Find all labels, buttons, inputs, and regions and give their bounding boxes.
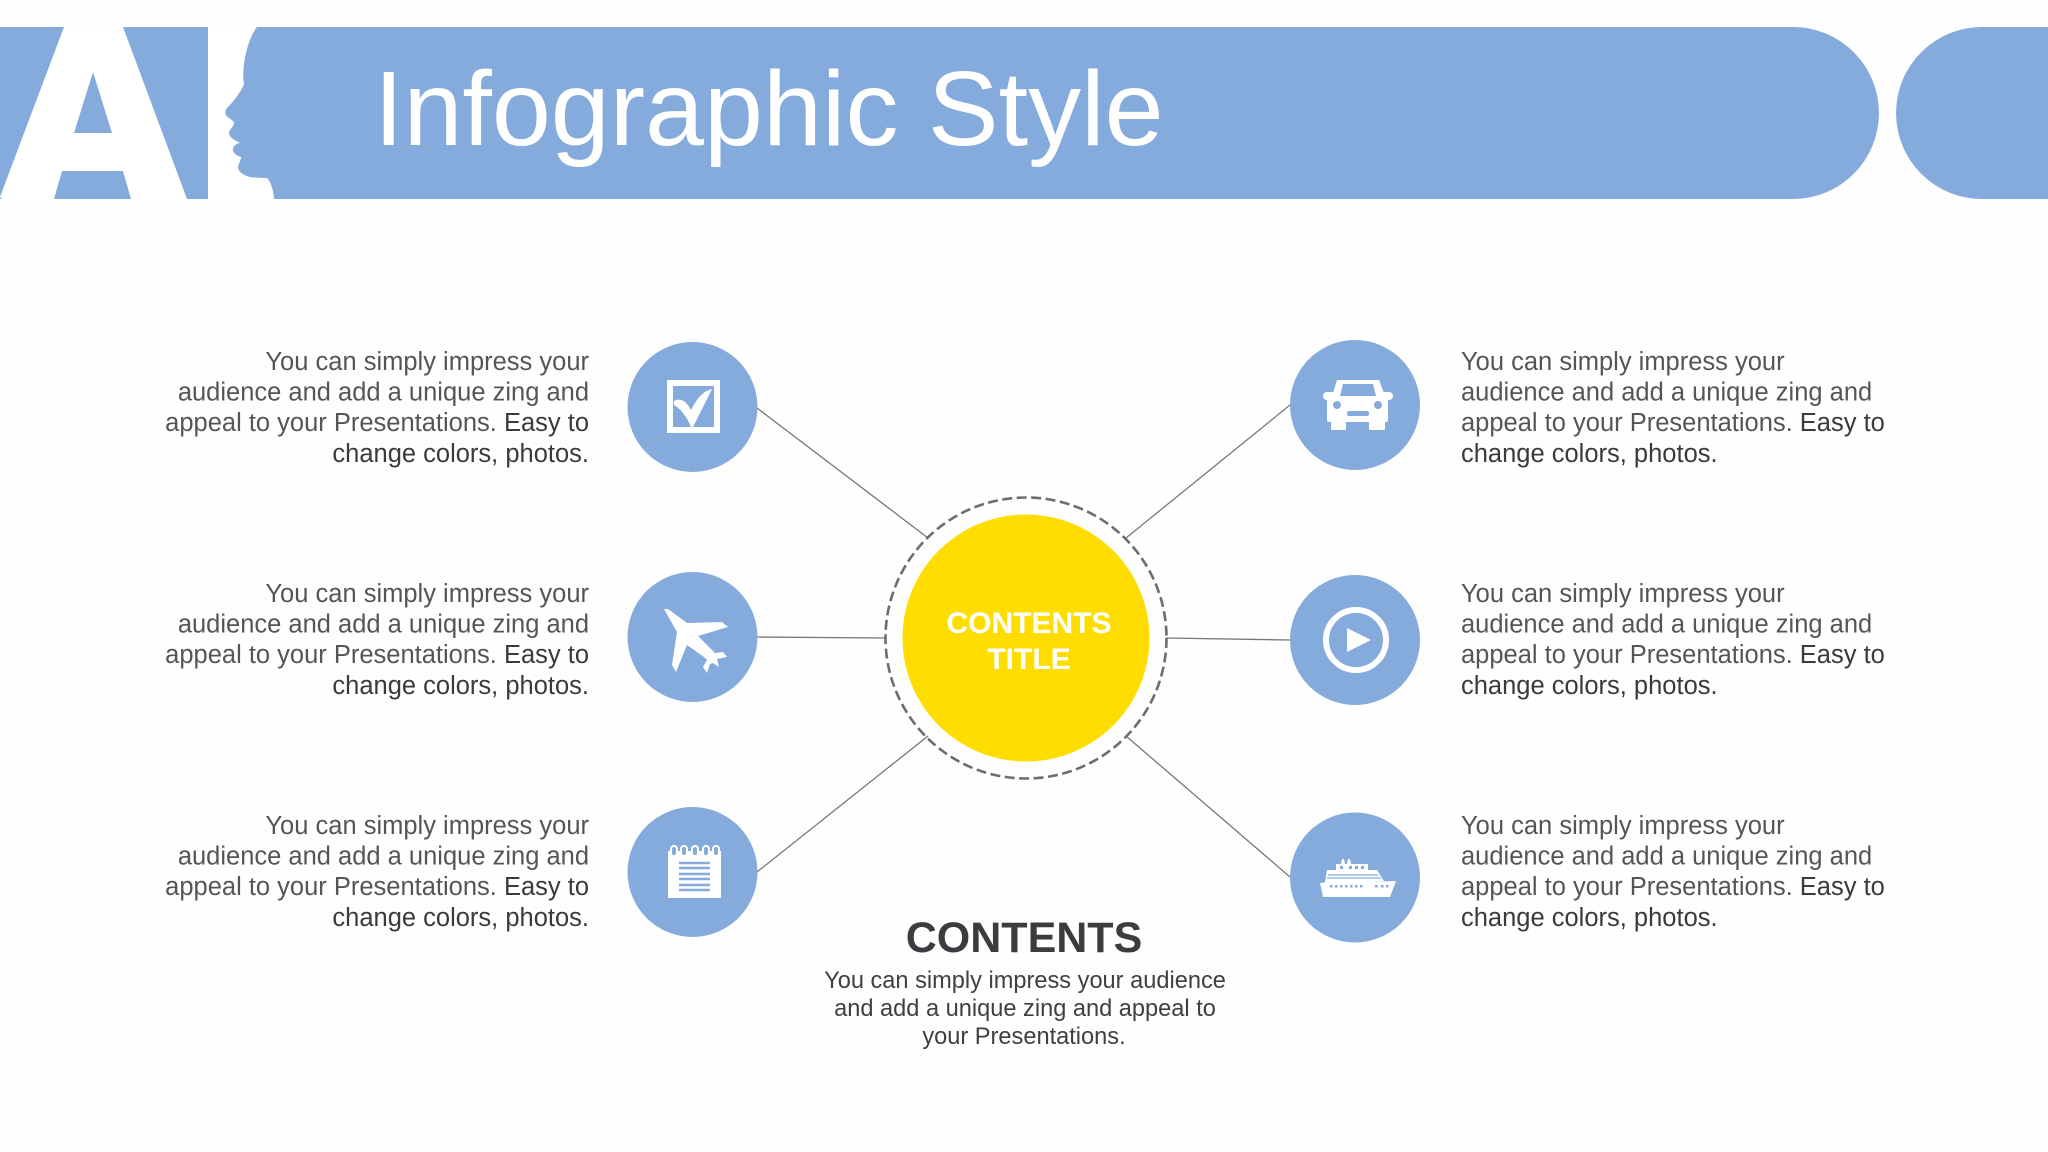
icon: checkbox <box>628 342 758 472</box>
text block: left top: appeal to your Presentations. Easy to <box>165 409 589 437</box>
central title: CONTENTS <box>946 607 1112 640</box>
contents description: and add a unique zing and appeal to <box>834 996 1216 1022</box>
text block: right bottom: change colors, photos. <box>1461 904 1718 932</box>
text block: right bottom <box>1461 812 1885 932</box>
header band <box>0 27 2048 199</box>
icon: notepad <box>628 807 758 937</box>
text block: left middle: audience and add a unique zing and <box>178 610 589 638</box>
text block: left bottom: audience and add a unique zing and <box>178 842 589 870</box>
text block: right bottom: audience and add a unique zing and <box>1461 842 1872 870</box>
text block: right top: audience and add a unique zing and <box>1461 378 1872 406</box>
text block: right top: appeal to your Presentations. Easy to <box>1461 409 1885 437</box>
text block: left top: change colors, photos. <box>332 440 589 468</box>
text block: right middle: appeal to your Presentations. Easy to <box>1461 641 1885 669</box>
text block: right top <box>1461 348 1885 468</box>
text block: left top: You can simply impress your <box>265 348 590 376</box>
icon: car <box>1290 340 1420 470</box>
text block: right middle: change colors, photos. <box>1461 672 1718 700</box>
contents description <box>824 968 1226 1050</box>
contents description: your Presentations. <box>922 1024 1126 1050</box>
text block: left middle: change colors, photos. <box>332 672 589 700</box>
text block: left bottom: appeal to your Presentations. Easy to <box>165 873 589 901</box>
text block: right middle <box>1461 580 1885 700</box>
icon: play button <box>1290 575 1420 705</box>
contents description: You can simply impress your audience <box>824 968 1226 994</box>
text block: right middle: You can simply impress your <box>1461 580 1785 608</box>
title: Infographic Style <box>374 50 1164 168</box>
logo letter A <box>0 27 187 199</box>
central circle <box>886 498 1166 778</box>
text block: left top <box>165 348 590 468</box>
text block: left middle: You can simply impress your <box>265 580 590 608</box>
logo letter I with face silhouette <box>208 27 274 199</box>
contents heading: CONTENTS <box>906 914 1142 962</box>
icon: airplane <box>628 572 758 702</box>
text block: left bottom: change colors, photos. <box>332 904 589 932</box>
text block: right top: change colors, photos. <box>1461 440 1718 468</box>
text block: left top: audience and add a unique zing and <box>178 378 589 406</box>
central circle: TITLE <box>987 643 1071 676</box>
text block: right bottom: You can simply impress your <box>1461 812 1785 840</box>
text block: right top: You can simply impress your <box>1461 348 1785 376</box>
text block: left middle: appeal to your Presentations. Easy to <box>165 641 589 669</box>
text block: left bottom <box>165 812 590 932</box>
text block: left bottom: You can simply impress your <box>265 812 590 840</box>
connector lines <box>757 405 1290 877</box>
text block: right bottom: appeal to your Presentations. Easy to <box>1461 873 1885 901</box>
text block: left middle <box>165 580 590 700</box>
text block: right middle: audience and add a unique zing and <box>1461 610 1872 638</box>
icon: ship <box>1290 812 1420 942</box>
